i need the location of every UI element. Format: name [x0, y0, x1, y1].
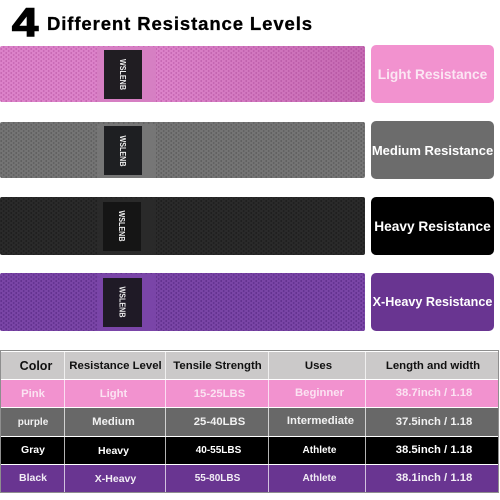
- table header row: [1, 352, 498, 379]
- cell: 38.5inch: 38.5inch / 1.18: [396, 444, 472, 456]
- cell: intermediate: Intermediate: [287, 415, 354, 427]
- cell: x-heavy: X-Heavy: [95, 472, 136, 484]
- band: gray: WSLENB: [118, 136, 128, 166]
- cell: 38.7inch: 38.7inch / 1.18: [396, 386, 472, 398]
- table row: gray: [1, 408, 498, 436]
- band: purple: [0, 273, 365, 331]
- table row: purple: [1, 465, 498, 492]
- header: tensile strength: Tensile Strength: [173, 360, 262, 372]
- label: light resistance: [371, 45, 494, 103]
- band: black: [0, 197, 365, 255]
- cell: 38.1inch: 38.1inch / 1.18: [396, 472, 472, 484]
- band: black: WSLENB: [117, 210, 127, 242]
- band: pink: WSLENB: [118, 59, 128, 90]
- cell: 25-40LBS: 25-40LBS: [194, 416, 245, 428]
- label: heavy resistance: Heavy Resistance: [374, 218, 491, 234]
- header: resistance level: Resistance Level: [69, 360, 162, 372]
- cell: athlete: Athlete: [303, 473, 336, 484]
- resistance bands illustration: [0, 46, 365, 331]
- label: x-heavy resistance: X-Heavy Resistance: [373, 295, 492, 309]
- title text: Different Resistance Levels: [47, 13, 313, 34]
- band: pink: [0, 46, 365, 102]
- label: heavy resistance: [371, 197, 494, 255]
- header: length and width: Length and width: [386, 360, 480, 372]
- cell: black: Black: [19, 472, 47, 484]
- header: color: Color: [20, 358, 52, 372]
- table row: pink: [1, 380, 498, 407]
- label: light resistance: Light Resistance: [378, 66, 487, 82]
- cell: heavy: Heavy: [98, 444, 129, 456]
- cell: 40-55LBS: 40-55LBS: [196, 445, 241, 456]
- comparison table: [1, 351, 498, 492]
- big number 4: 4: [12, 1, 38, 45]
- cell: beginner: Beginner: [295, 386, 344, 398]
- cell: 15-25LBS: 15-25LBS: [194, 388, 245, 400]
- cell: purple: purple: [18, 416, 48, 428]
- cell: pink: Pink: [21, 388, 45, 400]
- band: gray: [0, 122, 365, 178]
- cell: 37.5inch: 37.5inch / 1.18: [396, 416, 472, 428]
- label: medium resistance: [371, 121, 494, 179]
- label: x-heavy resistance: [371, 273, 494, 331]
- title: [12, 1, 313, 45]
- table row: black: [1, 437, 498, 464]
- cell: medium: Medium: [92, 416, 135, 428]
- header: uses: Uses: [305, 360, 332, 372]
- cell: gray: Gray: [21, 444, 45, 456]
- band: purple: WSLENB: [118, 286, 128, 318]
- cell: light: Light: [100, 388, 127, 400]
- cell: athlete: Athlete: [303, 445, 336, 456]
- cell: 55-80LBS: 55-80LBS: [195, 473, 240, 484]
- label: medium resistance: Medium Resistance: [372, 142, 493, 158]
